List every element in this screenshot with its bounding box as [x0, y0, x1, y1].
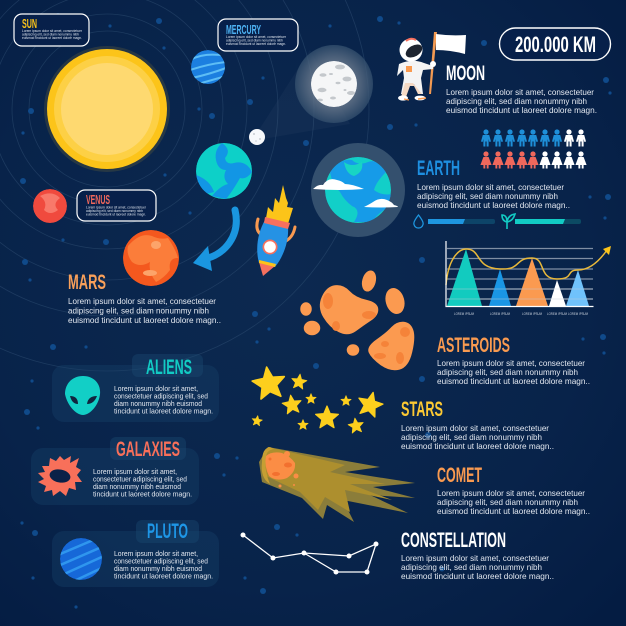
text: comet: [437, 488, 590, 516]
planet: earth small: [196, 143, 252, 199]
area chart: LOREM IPSUM: [568, 312, 588, 316]
panel: pluto: PLUTO: [147, 520, 188, 543]
text: stars: [401, 423, 554, 451]
icon: rocket: [257, 185, 295, 276]
label: sun: Lorem ipsum dolor sit amet, consectetuer: [22, 29, 83, 33]
panel: galaxies: consectetuer adipiscing elit, sed: [93, 474, 187, 484]
panel: pluto: diam nonummy nibh euismod: [114, 564, 202, 573]
text: earth: adipiscing elit, sed diam nonummy nibh: [417, 191, 558, 201]
text: comet: euismod tincidunt ut laoreet dolore magn..: [437, 506, 590, 516]
planet: small moon: [249, 129, 265, 145]
heading: moon: MOON: [446, 62, 485, 85]
label: sun: SUN: [22, 16, 37, 31]
panel: galaxies: diam nonummy nibh euismod: [93, 482, 181, 491]
label: sun: euismod tincidunt ut laoreet dolore magn.: [22, 36, 82, 40]
text: earth: Lorem ipsum dolor sit amet, consectetuer: [417, 182, 564, 192]
text: moon: Lorem ipsum dolor sit amet, consectetuer: [446, 87, 594, 97]
text: earth: euismod tincidunt ut laoreet dolore magn..: [417, 200, 570, 210]
sun: [44, 46, 170, 172]
text: moon: [446, 87, 597, 115]
heading: asteroids: ASTEROIDS: [437, 334, 510, 357]
icon: alien: [65, 376, 100, 415]
people pictogram: [480, 129, 587, 168]
icon: pluto: [60, 538, 102, 580]
panel: pluto: tincidunt ut laoreet dolore magn.: [114, 572, 213, 580]
panel: pluto: consectetuer adipiscing elit, sed: [114, 556, 208, 566]
text: earth: [417, 182, 570, 210]
constellation: [240, 532, 378, 574]
panel: aliens: [52, 354, 219, 422]
panel: aliens: diam nonummy nibh euismod: [114, 399, 202, 408]
area chart: [446, 241, 611, 316]
text: mars: [68, 296, 221, 325]
text: stars: euismod tincidunt ut laoreet dolore magn..: [401, 441, 554, 451]
area chart: LOREM IPSUM: [454, 312, 474, 316]
moon with halo: [295, 45, 373, 123]
text: stars: adipiscing elit, sed diam nonummy nibh: [401, 432, 542, 442]
text: asteroids: Lorem ipsum dolor sit amet, consectetuer: [437, 358, 585, 368]
planet: mercury: [190, 50, 226, 84]
label: sun: [14, 14, 89, 46]
panel: aliens: consectetuer adipiscing elit, sed: [114, 392, 208, 400]
planet: mars: [123, 230, 179, 286]
panel: aliens: ALIENS: [146, 356, 192, 379]
heading: constellation: CONSTELLATION: [401, 529, 506, 552]
text: comet: adipiscing elit, sed diam nonummy nibh: [437, 497, 578, 507]
label: mercury: Lorem ipsum dolor sit amet, consectetuer: [226, 35, 287, 39]
text: constellation: Lorem ipsum dolor sit amet, consectetuer: [401, 553, 549, 563]
text: stars: Lorem ipsum dolor sit amet, consectetuer: [401, 423, 549, 433]
heading: mars: MARS: [68, 271, 106, 294]
text: asteroids: [437, 358, 590, 386]
distance badge: [500, 28, 610, 60]
label: sun: adipiscing elit, sed diam nonummy nibh: [22, 33, 79, 37]
label: mercury: [218, 19, 298, 51]
label: venus: VENUS: [86, 192, 110, 207]
comet: [259, 447, 415, 522]
area chart: LOREM IPSUM: [522, 312, 542, 316]
label: mercury: euismod tincidunt ut laoreet dolore magn.: [226, 42, 286, 46]
label: mercury: MERCURY: [226, 22, 261, 37]
panel: pluto: [52, 520, 219, 587]
panel: aliens: tincidunt ut laoreet dolore magn.: [114, 406, 213, 416]
text: mars: adipiscing elit, sed diam nonummy nibh: [68, 306, 209, 316]
icon: galaxy: [38, 456, 82, 496]
plant bar: [502, 214, 581, 229]
text: constellation: adipiscing elit, sed diam nonummy nibh: [401, 562, 542, 572]
panel: pluto: Lorem ipsum dolor sit amet,: [114, 549, 198, 558]
text: moon: adipiscing elit, sed diam nonummy nibh: [446, 96, 587, 106]
text: constellation: euismod tincidunt ut laoreet dolore magn..: [401, 571, 554, 581]
heading: comet: COMET: [437, 464, 482, 487]
heading: stars: STARS: [401, 398, 443, 421]
text: comet: Lorem ipsum dolor sit amet, consectetuer: [437, 488, 585, 498]
text: constellation: [401, 553, 554, 581]
big earth with halo: [311, 143, 405, 237]
text: mars: Lorem ipsum dolor sit amet, consectetuer: [68, 296, 216, 306]
astronaut with flag: [397, 32, 466, 101]
label: mercury: adipiscing elit, sed diam nonummy nibh: [226, 39, 283, 43]
arrow: blue curve: [193, 210, 236, 271]
text: asteroids: euismod tincidunt ut laoreet dolore magn..: [437, 376, 590, 386]
text: asteroids: adipiscing elit, sed diam nonummy nibh: [437, 367, 578, 377]
heading: earth: EARTH: [417, 157, 460, 180]
asteroids: [301, 270, 414, 369]
panel: galaxies: tincidunt ut laoreet dolore magn.: [93, 490, 192, 498]
stars: [251, 365, 385, 433]
text: moon: euismod tincidunt ut laoreet dolore magn.: [446, 105, 597, 115]
panel: galaxies: Lorem ipsum dolor sit amet,: [93, 467, 177, 476]
area chart: LOREM IPSUM: [547, 312, 567, 316]
panel: galaxies: GALAXIES: [116, 438, 180, 461]
label: venus: euismod tincidunt ut laoreet dolore magn.: [86, 213, 146, 217]
panel: galaxies: [31, 437, 199, 505]
orbit rings: [0, 0, 369, 371]
label: venus: [77, 190, 156, 221]
planet: venus: [33, 189, 67, 223]
light beam between moon and earth: [257, 50, 350, 140]
water bar: [414, 215, 495, 228]
label: venus: adipiscing elit, sed diam nonummy nibh: [86, 209, 143, 213]
panel: aliens: Lorem ipsum dolor sit amet,: [114, 384, 198, 393]
text: mars: euismod tincidunt ut laoreet dolore magn..: [68, 315, 221, 325]
label: venus: Lorem ipsum dolor sit amet, consectetuer: [86, 206, 147, 210]
area chart: LOREM IPSUM: [490, 312, 510, 316]
